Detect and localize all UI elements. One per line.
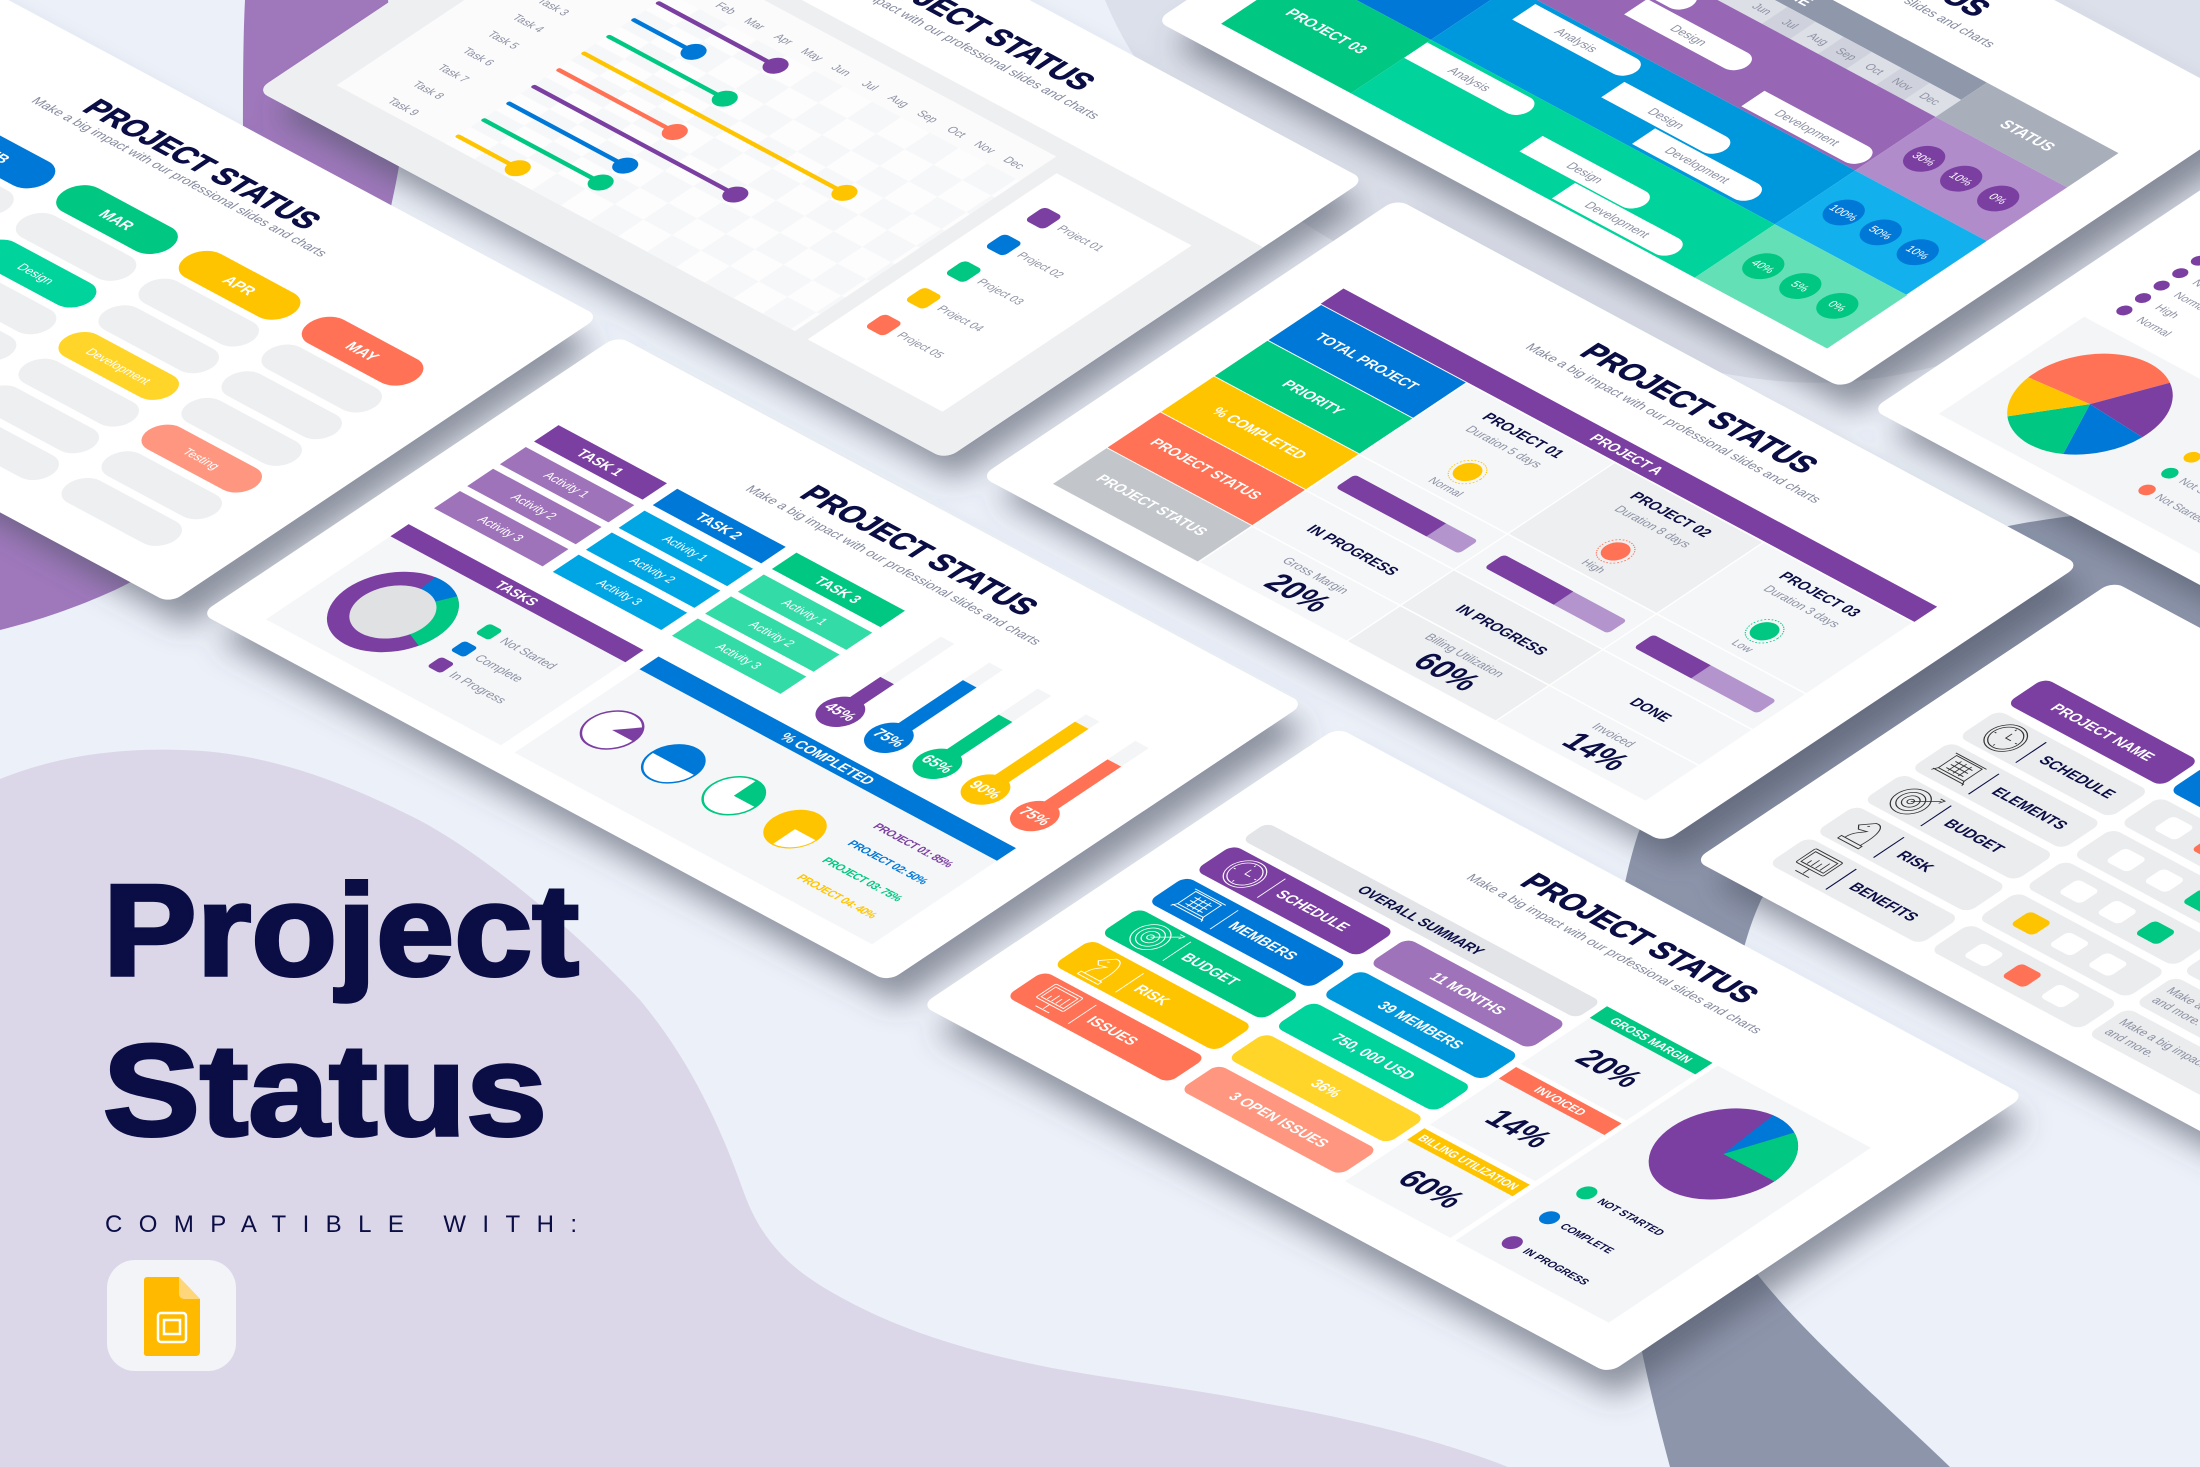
task labels: Task 7 — [434, 63, 472, 85]
month labels: Apr — [770, 32, 796, 47]
slide subtitle: Make a big impact with our professional slides and charts — [742, 483, 1045, 647]
month labels: Nov — [971, 140, 998, 156]
project percentages: PROJECT 01: 85% — [870, 822, 956, 870]
task 2 column: Activity 3 — [593, 577, 646, 608]
project 02 row: 50% — [1865, 224, 1894, 242]
slide subtitle: Make a big impact with our professional slides and charts — [1522, 341, 1825, 505]
task 1 column: Activity 2 — [507, 492, 561, 522]
panel: monthly timeline slide — [0, 0, 599, 603]
category pills: RISK — [1129, 982, 1174, 1008]
slide title: PROJECT STATUS — [75, 95, 328, 234]
project 02 row: 10% — [1902, 244, 1931, 261]
timeline header: Sep — [1832, 47, 1859, 63]
panel: colored gantt table slide — [1156, 0, 2200, 388]
panel: tasks donut: TASKS — [491, 578, 543, 608]
legend panel: Project 05 — [894, 331, 946, 360]
project 01 column: Duration 5 days — [1462, 424, 1546, 470]
donut legend: In Progress — [445, 670, 510, 706]
month labels: Dec — [1000, 155, 1027, 171]
stat cards: 20% — [1567, 1043, 1652, 1093]
priority list: Normal — [2133, 316, 2174, 339]
notes: and more. — [2101, 1026, 2159, 1059]
timeline header: Dec — [1915, 91, 1943, 107]
chart panel — [337, 0, 1056, 331]
progress pie 4 — [750, 802, 840, 856]
slide title: PROJECT STATUS — [792, 481, 1046, 621]
project 02 column: Duration 8 days — [1611, 503, 1695, 550]
task 1 column: TASK 1 — [572, 447, 627, 479]
slide subtitle: Make a big impact with our professional slides and charts — [28, 95, 331, 259]
task 3 column — [672, 553, 905, 694]
value pills: 11 MONTHS — [1425, 970, 1510, 1018]
task 3 column: Activity 2 — [745, 619, 798, 649]
project 02 column: High — [1578, 558, 1608, 575]
project 02 row: Design — [1644, 106, 1688, 131]
project percentages: PROJECT 04: 40% — [793, 873, 880, 921]
task 1 column: Activity 3 — [474, 514, 527, 544]
legend panel — [808, 173, 1192, 412]
project 01 column: 20% — [1256, 568, 1340, 617]
task 3 column: Activity 3 — [712, 641, 765, 671]
stat cards: 14% — [1477, 1104, 1561, 1153]
project 02 row: Development — [1661, 145, 1734, 186]
legend panel: Project 04 — [934, 304, 986, 334]
panel: priority pie slide — [1872, 130, 2200, 778]
stat cards: GROSS MARGIN — [1606, 1015, 1696, 1065]
project 03 column: Invoiced — [1588, 721, 1639, 750]
stat cards — [1345, 1006, 1713, 1238]
notes — [2101, 985, 2200, 1079]
pie chart — [1618, 1090, 1829, 1218]
compatible with label: COMPATIBLE WITH: — [105, 1211, 577, 1238]
month labels: Mar — [741, 16, 768, 32]
month labels: Feb — [712, 1, 739, 17]
category pills: MEMBERS — [1224, 919, 1302, 963]
task pills: Testing — [179, 446, 224, 472]
project 01 row — [1381, 0, 2067, 241]
task labels: Task 8 — [409, 80, 447, 101]
project 01 row: Design — [1666, 23, 1711, 48]
background shape: light ribbon top right — [1105, 0, 2200, 383]
timeline header: Aug — [1804, 31, 1831, 47]
project 03 row — [1221, 0, 1907, 349]
background shape: lavender blob — [0, 750, 1508, 1467]
row labels: PRIORITY — [1277, 378, 1348, 418]
task pills: Design — [14, 261, 58, 287]
task labels: Task 6 — [459, 46, 497, 68]
row labels: SCHEDULE — [2034, 754, 2119, 801]
title: Status: Status — [103, 1017, 547, 1163]
timeline header — [1592, 0, 1987, 117]
project 03 column: 14% — [1554, 727, 1638, 776]
project 03 row: 0% — [1824, 299, 1848, 314]
category pills: ISSUES — [1082, 1014, 1142, 1048]
project 01 row: Development — [1771, 108, 1844, 148]
task pills: Development — [82, 346, 155, 387]
row labels: % COMPLETED — [1207, 405, 1310, 462]
project 03 row: PROJECT 03 — [1281, 6, 1371, 57]
thermometer chart: 75% — [868, 726, 909, 750]
month labels — [712, 1, 1027, 171]
project 02 column: IN PROGRESS — [1451, 602, 1552, 658]
project 02 row: Analysis — [1551, 26, 1601, 55]
overall summary header: OVERALL SUMMARY — [1353, 884, 1488, 958]
pie legend: COMPLETE — [1556, 1222, 1617, 1256]
month labels: Jun — [828, 63, 853, 78]
donut legend: Complete — [471, 653, 527, 684]
chart grid — [446, 0, 1020, 331]
legend panel: Project 01 — [1054, 224, 1106, 254]
task labels: Task 5 — [484, 30, 522, 51]
timeline header: Jul — [1778, 18, 1801, 31]
timeline header: Oct — [1861, 62, 1887, 77]
row labels: PROJECT STATUS — [1091, 473, 1211, 539]
category pills — [1006, 845, 1395, 1083]
donut chart — [300, 556, 486, 668]
month labels: Aug — [884, 93, 912, 109]
row labels: RISK — [1892, 849, 1938, 875]
project 01 column: Gross Margin — [1279, 555, 1352, 596]
month labels: Oct — [943, 125, 969, 140]
overall summary header — [1242, 822, 1602, 1019]
project 02 column: 60% — [1405, 647, 1490, 696]
value pills: 3 OPEN ISSUES — [1224, 1090, 1333, 1150]
row labels — [1053, 305, 1466, 561]
project 02 row: 100% — [1825, 203, 1860, 223]
thermometer chart: 45% — [820, 700, 860, 724]
project 03 column: DONE — [1625, 696, 1676, 725]
thermometer chart — [805, 631, 1159, 837]
row labels: TOTAL PROJECT — [1310, 331, 1422, 393]
value pills: 39 MEMBERS — [1373, 999, 1468, 1052]
panel: project A status slide — [981, 199, 2080, 842]
value pills: 36% — [1306, 1077, 1345, 1100]
task 2 column: TASK 2 — [690, 511, 746, 542]
icon: google slides — [107, 1260, 236, 1371]
slide subtitle: Make a big impact with our professional slides and charts — [1463, 871, 1766, 1036]
grey frame — [257, 0, 1263, 459]
value pills — [1180, 938, 1567, 1175]
legend panel: Project 03 — [974, 277, 1026, 307]
stat cards: BILLING UTILIZATION — [1414, 1133, 1522, 1192]
status cells — [1930, 797, 2200, 1114]
project header 2 — [2169, 765, 2200, 873]
pie legend: NOT STARTED — [1594, 1197, 1667, 1238]
donut legend: Not Started — [496, 636, 560, 672]
project 01 row: 30% — [1908, 151, 1938, 168]
donut legend — [425, 623, 563, 706]
project A header — [1321, 289, 1937, 622]
timeline header: Jun — [1749, 2, 1774, 17]
panel: gantt chart slide — [257, 0, 1365, 459]
legend panel: Project 02 — [1014, 251, 1066, 280]
project 03 row: Design — [1563, 160, 1607, 186]
category pills: BUDGET — [1176, 951, 1243, 989]
task 1 column — [434, 425, 667, 566]
project name header: PROJECT NAME — [2046, 701, 2159, 764]
task 3 column: Activity 1 — [778, 597, 831, 627]
background shape: purple blob — [0, 0, 401, 630]
task labels: Task 4 — [509, 13, 547, 35]
project name header — [2006, 678, 2199, 786]
project 03 row: 40% — [1748, 258, 1777, 275]
project 03 column: Duration 3 days — [1760, 583, 1844, 630]
progress pie 1 — [568, 703, 656, 757]
month labels: May — [797, 47, 826, 63]
value pills: 750, 000 USD — [1327, 1031, 1419, 1083]
project 01 column — [1216, 398, 1593, 634]
thermometer chart: 65% — [917, 752, 957, 776]
project 01 row: 0% — [1985, 192, 2009, 206]
progress pie 2 — [629, 737, 718, 791]
project A header: PROJECT A — [1585, 432, 1667, 478]
task 1 column: Activity 1 — [540, 470, 593, 500]
gantt bars — [449, 0, 938, 287]
priority list: High — [2152, 303, 2181, 321]
project percentages: PROJECT 02: 50% — [844, 839, 930, 887]
project percentages — [793, 822, 956, 921]
stat cards: 60% — [1389, 1164, 1474, 1214]
thermometer chart: 75% — [1014, 805, 1055, 828]
task pills — [0, 234, 351, 498]
slide title: PROJECT STATUS — [1513, 869, 1766, 1008]
status header — [1936, 83, 2118, 187]
empty schedule cells — [0, 142, 391, 551]
month headers: MAY — [340, 340, 383, 364]
category pills: SCHEDULE — [1271, 888, 1354, 934]
priority list — [2113, 254, 2200, 339]
project 01 column: PROJECT 01 — [1478, 410, 1568, 461]
project 03 column — [1515, 558, 1891, 793]
pie panel — [1455, 1066, 1871, 1323]
project 03 row: Analysis — [1444, 65, 1495, 94]
panel: tasks donut — [266, 524, 644, 745]
row labels: ELEMENTS — [1987, 785, 2071, 832]
timeline header: Nov — [1888, 77, 1916, 93]
task labels: Task 9 — [384, 96, 422, 118]
title: Project: Project — [103, 857, 579, 1003]
month headers: MAR — [94, 207, 138, 233]
task 3 column: TASK 3 — [809, 575, 865, 606]
panel: overall summary slide — [921, 727, 2025, 1373]
progress pie 3 — [690, 769, 779, 823]
thermometer chart: 90% — [965, 778, 1005, 802]
row labels: BENEFITS — [1844, 880, 1922, 924]
project 01 column: Normal — [1425, 476, 1466, 499]
month headers: APR — [218, 274, 260, 298]
row labels: BUDGET — [1939, 817, 2009, 856]
project 03 row: 5% — [1787, 280, 1811, 294]
month headers — [0, 114, 434, 392]
task 2 column — [553, 489, 786, 630]
background shape: grey-blue ribbon — [1604, 505, 2200, 1467]
project 02 column — [1365, 478, 1742, 713]
project 02 row — [1301, 0, 1987, 295]
project 03 column: Low — [1728, 638, 1756, 655]
pie legend: IN PROGRESS — [1519, 1247, 1592, 1287]
project 03 column: PROJECT 03 — [1774, 569, 1865, 620]
row labels: PROJECT STATUS — [1146, 436, 1265, 503]
panel: tasks and percent completed slide — [201, 336, 1304, 982]
project percentages: PROJECT 03: 75% — [819, 856, 905, 904]
project 03 row: Development — [1581, 200, 1654, 240]
stat cards: INVOICED — [1530, 1084, 1590, 1118]
pie panel — [1939, 317, 2200, 596]
pie legend — [2133, 450, 2200, 525]
panel: project name matrix slide — [1695, 581, 2200, 1228]
status header: STATUS — [1995, 118, 2059, 154]
row labels — [1768, 710, 2150, 945]
month labels: Jul — [858, 79, 881, 93]
pie legend — [1497, 1184, 1671, 1289]
slide title: PROJECT STATUS — [1572, 339, 1826, 479]
panel: percent completed: % COMPLETED — [775, 731, 878, 788]
panel: percent completed — [514, 656, 1016, 944]
project 02 column: PROJECT 02 — [1625, 490, 1716, 540]
task 2 column: Activity 1 — [659, 533, 712, 564]
project 01 row: 10% — [1946, 171, 1975, 188]
pie chart — [1973, 333, 2200, 475]
task labels — [384, 0, 572, 118]
task 2 column: Activity 2 — [626, 555, 679, 585]
table cells — [1199, 383, 1914, 801]
project 01 column: IN PROGRESS — [1302, 523, 1403, 578]
project 02 column: Billing Utilization — [1421, 631, 1508, 679]
month labels: Sep — [913, 109, 941, 125]
